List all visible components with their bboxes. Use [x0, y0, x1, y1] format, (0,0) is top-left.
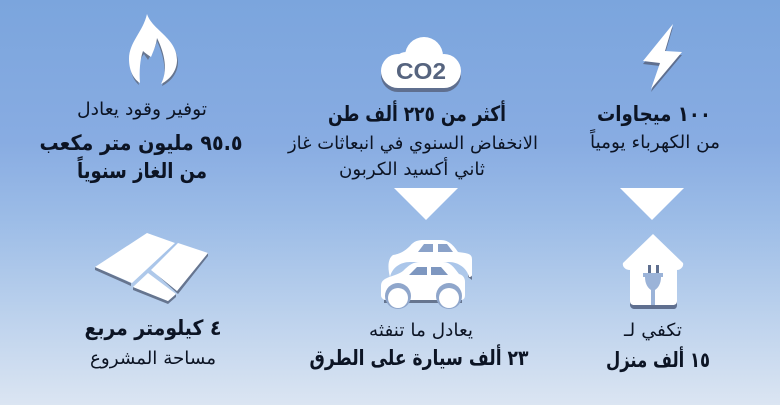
icon: two cars: [381, 240, 472, 309]
text: tons headline: أكثر من ٢٢٥ ألف طن: [328, 99, 506, 126]
text: megawatts headline: ١٠٠ ميجاوات: [597, 102, 711, 126]
text: gas annually: من الغاز سنوياً: [77, 155, 207, 183]
text: enough for: تكفي لـ: [623, 320, 682, 341]
text: electricity daily: من الكهرباء يومياً: [589, 129, 720, 153]
panel: project area: [84, 233, 221, 369]
icon: CO2 cloud: [381, 37, 461, 92]
text: equivalent emissions: يعادل ما تنفثه: [369, 320, 473, 341]
arrow: CO2 to cars: [394, 188, 458, 220]
text: annual reduction line 2: ثاني أكسيد الكربون: [339, 157, 485, 180]
text: gas volume: ٩٥.٥ مليون متر مكعب: [40, 131, 242, 155]
arrow: power to homes: [620, 188, 684, 220]
text: fuel saving: توفير وقود يعادل: [77, 99, 207, 120]
text: annual reduction line 1: الانخفاض السنوي في انبعاثات غاز: [287, 133, 538, 154]
icon: solar panels: [95, 233, 208, 304]
panel: cars: [310, 240, 529, 370]
panel: homes: [606, 234, 710, 372]
panel: gas savings: [40, 14, 242, 183]
text: cars headline: ٢٣ ألف سيارة على الطرق: [310, 343, 529, 370]
panel: CO2 reduction: [287, 37, 538, 180]
icon: lightning bolt: [643, 24, 682, 92]
panel: megawatts: [589, 24, 720, 153]
icon: house with plug: [623, 234, 683, 309]
text: project area: مساحة المشروع: [90, 348, 216, 369]
icon: CO2 cloud: CO2: [396, 58, 446, 84]
icon: flame: [129, 14, 178, 86]
text: area headline: ٤ كيلومتر مربع: [84, 316, 221, 340]
text: homes headline: ١٥ ألف منزل: [606, 345, 710, 372]
